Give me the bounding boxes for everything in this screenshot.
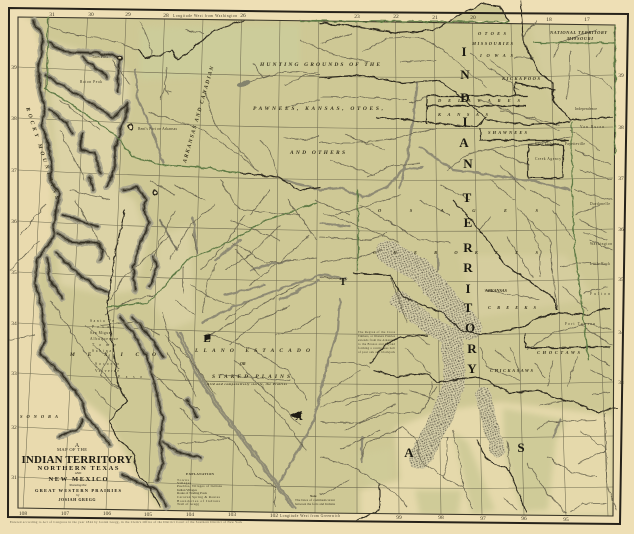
label: Rocky Mountains rotated: ROCKY MOUNTAINS xyxy=(24,106,59,200)
scale: top longitude labels: 22 xyxy=(393,14,399,20)
small settlement labels: Taos Pass xyxy=(92,55,109,59)
label: Texas letters: T xyxy=(340,277,347,288)
scale: bottom longitude labels: 103 xyxy=(228,512,236,518)
labels: tribal nations: OTOES xyxy=(478,31,506,36)
small settlement labels: Fort Gibson xyxy=(535,142,559,146)
small settlement labels: Independence xyxy=(575,107,597,111)
label: vertical Indian Territory: T xyxy=(463,190,472,205)
labels: tribal nations: OSAGES xyxy=(378,208,538,213)
small settlement labels xyxy=(80,55,612,379)
green patch above the top border xyxy=(450,4,510,21)
scale: latitude labels: 39 xyxy=(618,73,624,79)
label: hunting grounds xyxy=(253,62,383,156)
title cartouche: NEW MEXICO xyxy=(48,476,108,483)
lake xyxy=(235,79,251,89)
small settlement labels: Albuquerque xyxy=(90,337,118,341)
scale: top longitude labels: 29 xyxy=(125,12,131,18)
label: vertical Indian Territory: I xyxy=(465,281,471,296)
scale: bottom longitude labels: 95 xyxy=(563,517,569,523)
label: vertical Indian Territory: I xyxy=(461,44,467,59)
label: Llano Estacado: STAKED PLAINS xyxy=(212,374,290,380)
label: Texas letters: E xyxy=(203,333,211,345)
label: Llano Estacado: LLANO ESTACADO xyxy=(194,348,310,354)
lower note dark marks xyxy=(205,334,302,418)
legend: explanation: Pueblos, Villages of Indians xyxy=(177,484,223,489)
scale: top longitude labels: 23 xyxy=(354,14,360,20)
principal dark rivers and boundaries xyxy=(107,0,617,520)
cross timbers dotted belts xyxy=(388,252,498,458)
small settlement labels: Socorro xyxy=(95,362,119,366)
scale: top longitude labels: 28 xyxy=(163,13,169,19)
legend: explanation: EXPLANATION xyxy=(186,472,215,476)
small settlement labels: Valverde xyxy=(95,369,119,373)
scale: latitude labels: 31 xyxy=(11,475,17,481)
label: Bent's Fort: Bent's Fort on Arkansas xyxy=(138,127,178,131)
legend: explanation: Caravan Spring & Routes xyxy=(177,495,221,499)
scale: bottom longitude labels: 96 xyxy=(521,516,527,522)
note block xyxy=(358,330,396,354)
scale: bottom longitude labels: 107 xyxy=(61,511,69,517)
label: Texas letters: S xyxy=(517,440,525,455)
label: vertical Indian Territory xyxy=(459,44,477,376)
legend: explanation: Route of Trading Posts xyxy=(177,491,208,495)
scale: latitude labels xyxy=(11,65,624,481)
labels: tribal nations: CHICKASAWS xyxy=(490,368,533,373)
label: vertical Indian Territory: I xyxy=(462,114,468,129)
label: vertical Indian Territory: R xyxy=(467,341,477,356)
small settlement labels: Pecos xyxy=(92,325,115,329)
scale: bottom longitude labels xyxy=(19,511,569,523)
small settlement labels: San Miguel xyxy=(90,331,112,335)
scale: bottom longitude labels: 106 xyxy=(103,511,111,517)
scale: top longitude labels: 31 xyxy=(49,12,55,18)
scale: latitude labels: 34 xyxy=(618,330,624,336)
labels: tribal nations: NATIONAL TERRITORY xyxy=(549,30,608,35)
label: Texas letters xyxy=(203,277,525,460)
scale: top longitude labels: 30 xyxy=(88,12,94,18)
scale: bottom longitude labels: 98 xyxy=(438,515,444,521)
note at bottom right of Staked Plains xyxy=(295,494,336,506)
label: vertical Indian Territory: N xyxy=(460,67,470,82)
scale: top longitude labels: 26 xyxy=(240,13,246,19)
small settlement labels: Fort Towson xyxy=(565,322,595,326)
label: vertical Indian Territory: R xyxy=(463,260,473,275)
label: Llano Estacado: OR xyxy=(240,361,246,366)
labels: tribal nations: MISSOURI xyxy=(566,36,593,41)
note at bottom right of Staked Plains: Note xyxy=(310,494,317,498)
scale: latitude labels: 33 xyxy=(11,371,17,377)
labels: tribal nations: KICKAPOOS xyxy=(501,76,540,81)
small settlement labels: Creek Agency xyxy=(535,157,561,161)
small settlement labels: Fayetteville xyxy=(565,142,585,146)
label: rotated prairie name: ARKANSAS AND CANADIAN xyxy=(182,65,216,165)
labels: tribal nations: ARKANSAS xyxy=(484,288,507,293)
scale: latitude labels: 39 xyxy=(11,65,17,71)
labels: tribal nations: KANSAS xyxy=(437,112,488,117)
scale: latitude labels: 33 xyxy=(618,380,624,386)
label: hunting grounds: PAWNEES, KANSAS, OTOES, xyxy=(253,106,383,112)
scale: top longitude labels: 20 xyxy=(470,15,476,21)
labels: tribal nations: MISSOURIES xyxy=(471,41,513,46)
small settlement labels: Fulton xyxy=(590,292,610,296)
fine print copyright: Entered according to Act of Congress in the year 1844 by Josiah Gregg, in the Clerk's Office of the District Court of the Southern District of New York xyxy=(10,520,242,525)
legend: explanation: Towns xyxy=(177,478,190,482)
label: Llano Estacado xyxy=(194,348,310,386)
labels: tribal nations: CREEKS xyxy=(488,305,536,310)
note at bottom right of Staked Plains: between the forts and Indians xyxy=(295,502,336,506)
scale: top longitude labels: 18 xyxy=(546,17,552,23)
label: vertical Indian Territory: T xyxy=(464,300,473,315)
note block: to the Brazos and beyond xyxy=(358,342,396,346)
scale: latitude labels: 37 xyxy=(618,176,624,182)
mountain ridges xyxy=(33,20,200,507)
note block: forming a continuous belt xyxy=(358,346,395,350)
label: Mexico: MEXICO xyxy=(69,352,156,358)
label: hunting grounds: AND OTHERS xyxy=(289,150,345,156)
labels: tribal nations: SHAWNEES xyxy=(488,130,527,135)
title cartouche: INDIAN TERRITORY xyxy=(22,454,133,466)
scale: latitude labels: 36 xyxy=(618,227,624,233)
label: Llano Estacado: Arid and comparatively sterile, the Prairies xyxy=(206,382,288,386)
scale: top longitude labels: Longitude West from Washington xyxy=(173,14,237,18)
scale: latitude labels: 38 xyxy=(618,125,624,131)
legend: explanation: Villages xyxy=(177,481,192,485)
labels: tribal nations: CHOCTAWS xyxy=(537,350,580,355)
scale: latitude labels: 35 xyxy=(11,270,17,276)
title cartouche: AND xyxy=(75,471,82,475)
labels: tribal nations xyxy=(20,30,608,419)
title cartouche: by xyxy=(76,493,80,497)
small settlement labels: Sabinal xyxy=(92,349,114,353)
title cartouche: MAP OF THE xyxy=(57,447,87,452)
scale: bottom longitude labels: 108 xyxy=(19,511,27,517)
title cartouche: A xyxy=(75,443,80,449)
note block: The Region of the Cross xyxy=(358,330,396,334)
labels: tribal nations: SONORA xyxy=(20,414,58,419)
scale: bottom longitude labels: 102 xyxy=(270,513,278,519)
scale: bottom longitude labels: 99 xyxy=(396,515,402,521)
label: Texas letters: A xyxy=(404,445,414,460)
label: vertical Indian Territory: D xyxy=(460,90,470,105)
title cartouche: GREAT WESTERN PRAIRIES xyxy=(35,488,121,493)
green survey boundaries and trail xyxy=(45,17,615,360)
scale: bottom longitude labels: Longitude West from Greenwich xyxy=(280,514,340,518)
scale: top longitude labels: 21 xyxy=(432,15,438,21)
legend: explanation xyxy=(177,472,223,506)
small settlement labels: Washington xyxy=(590,242,612,246)
note block: extends from the Arkansas xyxy=(358,338,396,342)
legend: explanation: Boundaries of Indians xyxy=(177,499,221,503)
small settlement labels: Paso xyxy=(118,375,142,379)
scale: latitude labels: 34 xyxy=(11,321,17,327)
labels: tribal nations: CHEROKEES xyxy=(373,250,538,255)
scale: latitude labels: 37 xyxy=(11,168,17,174)
label: vertical Indian Territory: R xyxy=(463,240,473,255)
scale: bottom longitude labels: 97 xyxy=(480,516,486,522)
small settlement labels: Tome xyxy=(92,343,116,347)
scale: latitude labels: 36 xyxy=(11,219,17,225)
note block: of post oak and blackjack xyxy=(358,350,396,354)
label: vertical Indian Territory: E xyxy=(464,215,472,230)
scale: bottom longitude labels: 104 xyxy=(186,512,194,518)
small settlement labels: Raton Peak xyxy=(80,80,102,84)
small settlement labels: Dardanelle xyxy=(590,202,610,206)
legend: explanation: Trail of Gregg xyxy=(177,502,199,506)
scale: latitude labels: 38 xyxy=(11,116,17,122)
scale: top longitude labels: 17 xyxy=(584,17,590,23)
legend: explanation: Indian Villages xyxy=(177,488,198,492)
label: vertical Indian Territory: N xyxy=(463,156,473,171)
note at bottom right of Staked Plains: The lines of communication xyxy=(295,498,335,502)
labels: tribal nations: IOWAS xyxy=(479,53,513,58)
label: vertical Indian Territory: Y xyxy=(467,361,477,376)
title cartouche xyxy=(22,443,133,502)
small settlement labels: Little Rock xyxy=(590,262,610,266)
title cartouche: NORTHERN TEXAS xyxy=(38,465,119,472)
label: vertical Indian Territory: O xyxy=(465,320,475,335)
title cartouche: JOSIAH GREGG xyxy=(58,497,96,502)
note block: Timbers, or Western Prairies xyxy=(358,334,396,338)
label: hunting grounds: HUNTING GROUNDS OF THE xyxy=(259,62,380,68)
small settlement labels: Van Buren xyxy=(580,125,604,129)
small settlement labels: Santa Fe xyxy=(90,319,114,323)
scale: latitude labels: 32 xyxy=(11,425,17,431)
grey river and escarpment bands xyxy=(135,70,570,508)
scale: top longitude labels xyxy=(49,12,590,23)
labels: tribal nations: DELAWARES xyxy=(437,98,520,103)
scale: bottom longitude labels: 105 xyxy=(144,512,152,518)
fort at Bents xyxy=(118,56,157,195)
scale: latitude labels: 35 xyxy=(618,277,624,283)
label: Texas letters: X xyxy=(295,411,303,423)
title cartouche: Showing the xyxy=(69,483,87,487)
label: vertical Indian Territory: A xyxy=(459,135,469,150)
